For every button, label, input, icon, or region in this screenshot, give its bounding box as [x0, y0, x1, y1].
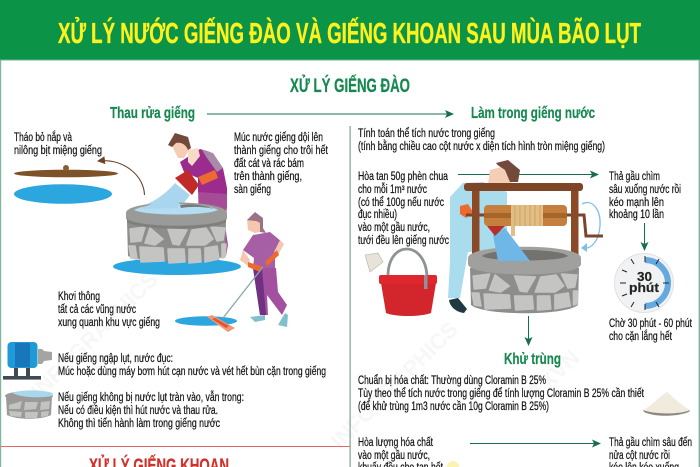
arrow: dissolve to drop	[470, 442, 600, 444]
woman legs	[253, 268, 287, 315]
red bucket	[175, 170, 199, 195]
text: clean well: Không thì tiến hành làm trong giếng nước	[58, 418, 220, 430]
text: drop the pail: khoảng 10 lần	[609, 209, 664, 221]
section heading: xử lý giếng đào: XỬ LÝ GIẾNG ĐÀO	[290, 75, 410, 97]
text: remove lid: Tháo bỏ nắp và	[14, 131, 72, 144]
text: pour water	[234, 132, 329, 196]
winch roller	[484, 205, 567, 226]
watermark	[26, 267, 585, 454]
subheading: khử trùng: Khử trùng	[504, 351, 561, 368]
text: compute volume: (tính bằng chiều cao cột nước x diện tích hình tròn miệng giếng)	[358, 140, 605, 153]
watermark: INFOGRAPHICS	[26, 267, 163, 404]
text: dissolve alum: tưới đều lên giếng nước	[358, 235, 449, 247]
text: drop pail half depth	[609, 437, 692, 467]
text: remove lid	[14, 131, 102, 157]
arrow: well to disinfect	[528, 316, 530, 345]
text: drop the pail: kéo mạnh lên	[609, 197, 664, 209]
rope	[511, 205, 543, 226]
woman head	[247, 220, 260, 233]
text: clean well: Nếu có điều kiện thì hút nước và thau rửa.	[58, 405, 218, 417]
water stream	[493, 228, 530, 261]
text: clear puddles: Khơi thông	[58, 291, 100, 303]
text: prepare chemicals: (để khử trùng 1m3 nước cần 10g Cloramin B 25%)	[358, 401, 549, 413]
man torso	[180, 149, 227, 194]
icon: chloramine powder	[643, 392, 690, 416]
text: clear puddles	[58, 291, 160, 329]
text: dissolve alum: Hòa tan 50g phèn chua	[358, 171, 448, 183]
text: clean well	[58, 391, 244, 430]
man legs	[198, 190, 228, 256]
watermark: TTXVN	[516, 345, 585, 414]
text: clear puddles: tất cả các vũng nước	[58, 304, 136, 316]
illustration: woman mopping	[175, 212, 288, 332]
text: compute volume: Tính toán thể tích nước trong giếng	[358, 128, 495, 140]
clock label	[629, 269, 660, 295]
text: wait	[609, 318, 693, 343]
text: remove lid: nilông bịt miệng giếng	[14, 145, 102, 157]
man head	[488, 166, 512, 184]
text: dissolve chemicals: vào một gầu nước,	[358, 450, 430, 462]
man neck and head	[188, 148, 200, 166]
text: prepare chemicals	[358, 375, 645, 413]
text: clear puddles: xung quanh khu vực giếng	[58, 317, 160, 329]
rotation arrows	[582, 203, 600, 248]
title banner	[0, 0, 700, 60]
icon: alum bag	[365, 253, 383, 272]
man shoe	[449, 298, 467, 313]
icon: red bucket	[379, 249, 437, 316]
water stream	[137, 183, 190, 208]
text: prepare chemicals: Chuẩn bị hóa chất: Thường dùng Cloramin B 25%	[358, 375, 546, 387]
arrow: thau rửa to làm trong	[207, 113, 453, 115]
illustration: man at winch well	[448, 160, 603, 313]
icon: well lid and opening	[14, 165, 118, 204]
subheading: thau rửa giếng: Thau rửa giếng	[110, 105, 195, 122]
text: pour water: thành giếng cho trôi hết	[234, 145, 329, 157]
text: flooded well	[58, 353, 326, 378]
text: flooded well: Múc hoặc dùng máy bơm hút cạn nước và vét hết bùn cặn trong giếng	[58, 366, 326, 378]
man glove	[198, 170, 218, 185]
clock label: phút	[629, 280, 660, 295]
clock label: 30	[637, 269, 652, 284]
text: compute volume	[358, 128, 605, 153]
text: drop the pail	[609, 171, 681, 221]
text: dissolve alum: (có thể 100g nếu nước	[358, 197, 444, 209]
mop head	[207, 315, 235, 332]
text: dissolve alum: vào một gầu nước,	[358, 222, 430, 234]
text: pour water: Múc nước giếng dội lên	[234, 132, 323, 144]
icon: small well	[5, 390, 53, 419]
woman shoes	[250, 313, 288, 327]
icon: 30 minute clock	[614, 254, 674, 312]
icon: chemical glow	[447, 461, 459, 467]
section divider	[1, 446, 350, 447]
text: pour water: đất cát và rác bám	[234, 158, 304, 170]
column divider	[350, 126, 351, 467]
text: flooded well: Nếu giếng ngập lụt, nước đục:	[58, 353, 173, 365]
woman torso	[243, 232, 282, 268]
illustration: man pouring water on well	[137, 133, 228, 256]
arrow: alum to bucket	[458, 174, 598, 176]
woman arms and gloves	[240, 240, 284, 266]
text: pour water: trên thành giếng,	[234, 171, 302, 183]
text: dissolve alum	[358, 171, 449, 247]
illustration: stone well with puddle	[113, 200, 241, 275]
man body	[448, 182, 507, 298]
text: clean well: Nếu giếng không bị nước lụt tràn vào, vẫn trong:	[58, 391, 244, 404]
text: dissolve alum: đục nhiều)	[358, 209, 397, 221]
subheading: làm trong giếng nước: Làm trong giếng nước	[471, 105, 595, 122]
falling water over the rim	[140, 200, 180, 209]
mop handle	[223, 267, 263, 318]
text: dissolve chemicals: Hòa lượng hóa chất	[358, 437, 434, 449]
watermark: INFOGRAPHICS	[326, 317, 463, 454]
axle and crank	[466, 215, 603, 236]
arrow: pull to wait	[644, 223, 646, 250]
text: drop pail half depth: nửa cột nước rồi	[609, 450, 670, 462]
illustration: stone well two	[468, 226, 581, 313]
arrow: lid removed	[98, 161, 144, 195]
man glove	[460, 204, 473, 218]
puddle	[175, 316, 237, 326]
text: drop the pail: Thả gầu chìm	[609, 171, 660, 183]
text: wait: cho cặn lắng hết	[609, 330, 673, 343]
posts and beam	[472, 190, 480, 256]
text: pour water: sàn giếng	[234, 184, 271, 196]
text: dissolve chemicals	[358, 437, 444, 467]
small bucket	[487, 226, 505, 236]
icon: water pump	[3, 342, 52, 380]
text: dissolve alum: cho mỗi 1m³ nước	[358, 183, 427, 196]
